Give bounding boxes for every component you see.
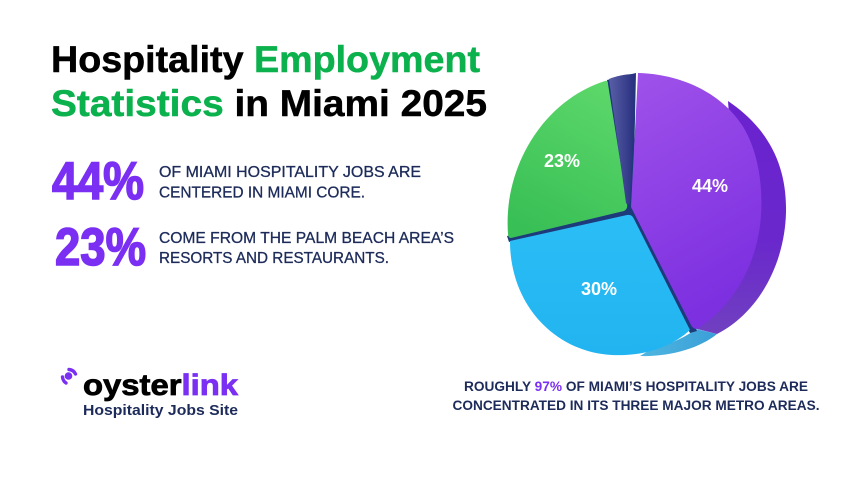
pie seams (507, 73, 697, 333)
pie slice: blue 30% (510, 215, 690, 355)
pie slice: green 23% (508, 81, 627, 238)
pie label: 30%: 30% (581, 279, 617, 299)
logo: OysterLink (62, 369, 238, 419)
pie slice: navy remainder (609, 74, 635, 204)
stat number: 44%: 44% (52, 152, 144, 211)
stat text: Miami core: CENTERED IN MIAMI CORE. (159, 184, 365, 202)
pie chart (507, 73, 786, 356)
stat number: 23%: 23% (55, 218, 146, 277)
pie label: 23%: 23% (544, 151, 580, 171)
title: Statistics in Miami 2025 (51, 83, 487, 124)
callout: 97 percent: CONCENTRATED IN ITS THREE MAJOR METRO AREAS. (452, 398, 820, 413)
logo wordmark: oyster link (83, 369, 238, 402)
stat: 44 percent (52, 152, 421, 211)
title: Hospitality Employment (51, 39, 480, 80)
pie side: blue depth (640, 329, 717, 356)
title (51, 39, 487, 124)
pie label: 44%: 44% (692, 176, 728, 196)
stat text: Palm Beach: RESORTS AND RESTAURANTS. (159, 250, 389, 267)
pie side: purple depth (697, 101, 786, 334)
stat text: Miami core: OF MIAMI HOSPITALITY JOBS ARE (159, 164, 421, 181)
icon: oyster signal mark (62, 370, 76, 383)
logo tagline: Hospitality Jobs Site (83, 402, 238, 419)
callout: 97 percent: ROUGHLY 97% OF MIAMI’S HOSPITALITY JOBS ARE (464, 379, 805, 394)
stat text: Palm Beach: COME FROM THE PALM BEACH AREA’S (159, 230, 454, 247)
stat: 23 percent (55, 218, 454, 277)
pie slice: purple 44% (631, 73, 761, 329)
